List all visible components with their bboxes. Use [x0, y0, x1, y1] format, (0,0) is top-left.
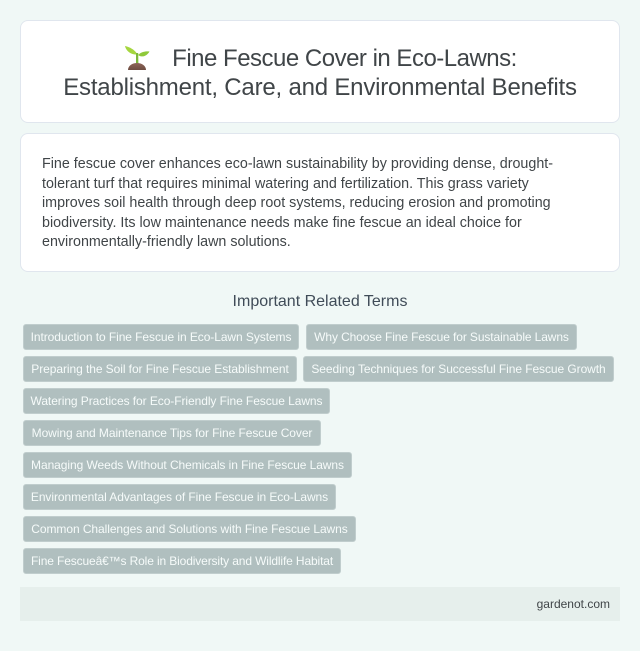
footer bar — [20, 587, 620, 621]
text block: description: Fine fescue cover enhances eco-lawn sustainability by providing dense, drought- — [42, 156, 553, 172]
tag: Common Challenges and Solutions with Fine Fescue Lawns — [31, 522, 348, 536]
text block: description: environmentally-friendly lawn solutions. — [42, 234, 291, 250]
tag list: related terms — [23, 324, 614, 574]
tag — [23, 324, 299, 350]
tag: Fine Fescueâ€™s Role in Biodiversity and Wildlife Habitat — [31, 554, 333, 568]
tag: Environmental Advantages of Fine Fescue in Eco-Lawns — [31, 490, 328, 504]
tag — [23, 420, 321, 446]
tag — [306, 324, 577, 350]
title: Establishment, Care, and Environmental Benefits — [63, 74, 577, 101]
title — [63, 45, 577, 101]
text block: description: improves soil health through deep root systems, reducing erosion and promoting — [42, 195, 551, 211]
tag — [23, 388, 330, 414]
tag — [23, 548, 341, 574]
footer text: gardenot.com — [537, 597, 610, 611]
tag — [23, 356, 297, 382]
text block: description: biodiversity. Its low maintenance needs make fine fescue an ideal choice for — [42, 214, 522, 230]
text block: description: tolerant turf that requires minimal watering and fertilization. This grass variety — [42, 176, 529, 192]
tag: Why Choose Fine Fescue for Sustainable Lawns — [314, 330, 569, 344]
tag — [23, 452, 352, 478]
panel: description card — [20, 133, 620, 272]
heading: related terms: Important Related Terms — [233, 293, 407, 310]
icon: seedling — [125, 46, 150, 70]
tag: Preparing the Soil for Fine Fescue Establishment — [31, 362, 289, 376]
tag: Watering Practices for Eco-Friendly Fine Fescue Lawns — [31, 394, 322, 408]
tag: Mowing and Maintenance Tips for Fine Fescue Cover — [32, 426, 312, 440]
tag: Seeding Techniques for Successful Fine Fescue Growth — [311, 362, 606, 376]
tag: Introduction to Fine Fescue in Eco-Lawn Systems — [31, 330, 291, 344]
panel: title card — [20, 20, 620, 123]
text block: description — [42, 156, 553, 250]
tag — [23, 516, 356, 542]
title: Fine Fescue Cover in Eco-Lawns: — [172, 45, 517, 72]
tag — [303, 356, 614, 382]
tag — [23, 484, 336, 510]
tag: Managing Weeds Without Chemicals in Fine Fescue Lawns — [31, 458, 344, 472]
